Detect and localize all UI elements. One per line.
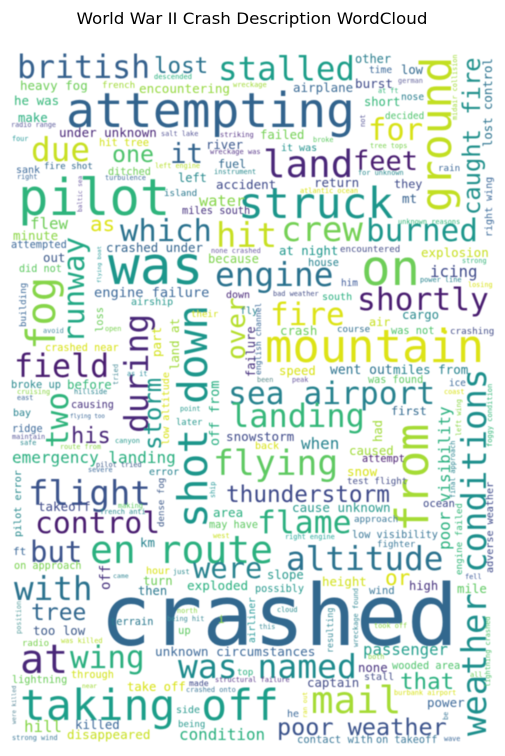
word: or: or: [385, 566, 410, 590]
word: down: down: [226, 290, 250, 301]
word: losing: losing: [468, 281, 493, 289]
word: structural failure: structural failure: [215, 676, 290, 684]
word: french anti: french anti: [100, 508, 146, 516]
word: low altitude: low altitude: [161, 372, 172, 445]
word: possibly: possibly: [255, 584, 304, 595]
word: their: their: [191, 310, 219, 320]
word: salt lake: salt lake: [161, 130, 198, 138]
word: miles south: miles south: [182, 205, 250, 217]
word: pilot error: pilot error: [13, 470, 24, 537]
word: snow: snow: [347, 464, 378, 479]
word: dense fog: dense fog: [157, 478, 167, 527]
word: crashed: crashed: [100, 567, 458, 666]
word: sea airport: sea airport: [228, 376, 435, 412]
word: building: building: [18, 283, 29, 327]
word: right wing: right wing: [484, 177, 495, 237]
word: came: came: [113, 572, 129, 580]
word: course: course: [337, 324, 370, 335]
word: ocean: ocean: [423, 498, 455, 510]
word: caused: caused: [349, 443, 394, 458]
word: as: as: [90, 212, 115, 236]
word: at ft: at ft: [378, 87, 398, 95]
word: through: through: [71, 670, 114, 681]
word: near: near: [82, 683, 97, 690]
word: burbank airport: burbank airport: [394, 689, 456, 697]
word: ditched: ditched: [108, 167, 151, 178]
word: poor weather: poor weather: [277, 713, 447, 741]
word: took off: took off: [374, 622, 407, 630]
word: flame: flame: [257, 505, 352, 541]
word: over: over: [222, 297, 252, 360]
word: left engine: left engine: [155, 162, 200, 170]
word: engine failed: engine failed: [454, 503, 465, 575]
word: not: not: [359, 114, 367, 127]
word: snowstorm: snowstorm: [226, 429, 294, 444]
word: failed: failed: [260, 128, 304, 142]
word: resulting: resulting: [325, 608, 335, 653]
word: just: just: [173, 568, 190, 576]
word: was not: was not: [391, 325, 434, 337]
word: midair collision: midair collision: [451, 55, 459, 120]
word: ice: ice: [449, 378, 466, 389]
word: accident: accident: [216, 177, 276, 192]
word: landing: landing: [230, 397, 365, 435]
word: severe: severe: [88, 466, 113, 474]
word: stalled: stalled: [218, 50, 355, 88]
word: british: british: [17, 50, 150, 86]
word: for: for: [368, 113, 423, 148]
word: speed: speed: [279, 364, 316, 378]
word: caught fire: caught fire: [458, 57, 486, 215]
word: out: out: [43, 250, 65, 265]
word: be: be: [442, 712, 450, 720]
word: avoid: avoid: [43, 327, 64, 335]
word: en route: en route: [90, 528, 273, 572]
word: went out: went out: [330, 363, 393, 378]
word: tree: tree: [31, 600, 86, 626]
word: for unknown: for unknown: [358, 169, 404, 177]
word: position: position: [15, 601, 23, 634]
word: which: which: [120, 214, 212, 249]
word: air: air: [369, 315, 390, 329]
word: mail: mail: [311, 678, 401, 722]
word: one: one: [112, 141, 154, 168]
word: contact with: contact with: [297, 734, 373, 746]
word: high: high: [409, 579, 438, 593]
word: decided: decided: [385, 111, 424, 122]
word: they: they: [394, 177, 422, 191]
word: airplane: airplane: [293, 80, 353, 95]
word: attempted: attempted: [11, 239, 67, 251]
word: from: from: [386, 424, 439, 532]
word: foggy condition: foggy condition: [486, 384, 494, 447]
word: were killed: were killed: [12, 686, 18, 724]
word: bad weather: bad weather: [273, 290, 319, 298]
word: taking off: taking off: [20, 681, 279, 731]
word: fly: fly: [240, 306, 258, 317]
word: runway: runway: [57, 237, 91, 343]
word: all: all: [470, 671, 483, 679]
word: him: him: [341, 278, 358, 289]
word: at: at: [20, 637, 68, 683]
word: fell: fell: [465, 573, 482, 581]
word: power: power: [427, 695, 465, 710]
word: side: side: [176, 705, 200, 716]
word: he: he: [287, 709, 299, 720]
word: right: right: [17, 173, 37, 181]
word: none crashed: none crashed: [211, 247, 261, 255]
word: fuel: fuel: [218, 157, 246, 171]
word: lightning crashed: lightning crashed: [484, 616, 492, 687]
word: low: low: [401, 63, 424, 77]
word: hillside: hillside: [74, 388, 107, 396]
word: height: height: [322, 574, 367, 589]
word: maintain: maintain: [12, 433, 45, 441]
word: crashing: crashing: [450, 326, 494, 337]
word: canyon: canyon: [115, 437, 140, 445]
word: struck: struck: [238, 179, 393, 229]
word: four: four: [12, 135, 28, 143]
word: return: return: [314, 175, 359, 190]
word: rain: rain: [438, 163, 460, 174]
word: up: up: [178, 625, 191, 637]
word: too low: too low: [33, 623, 86, 638]
word: were: were: [193, 551, 262, 585]
word: field: field: [14, 349, 109, 385]
word: off from: off from: [207, 381, 223, 446]
word: route from: route from: [60, 443, 101, 451]
word: on approach: on approach: [14, 561, 81, 572]
word: unknown reasons: unknown reasons: [398, 218, 460, 226]
word: may have: may have: [209, 520, 258, 531]
word: shortly: shortly: [357, 282, 489, 318]
word: his: his: [71, 424, 111, 449]
word: power line: power line: [420, 276, 462, 284]
word: unknown circumstances: unknown circumstances: [155, 644, 315, 659]
word: burst: burst: [355, 76, 393, 91]
word: mt: mt: [402, 191, 417, 206]
word: land at: land at: [168, 318, 182, 370]
word: flew: flew: [30, 214, 69, 233]
word: killed: killed: [75, 717, 120, 732]
word: ran out: ran out: [302, 692, 309, 718]
word: cloud: cloud: [277, 606, 297, 614]
word: because: because: [208, 252, 259, 266]
word: tried: tried: [112, 364, 120, 385]
word: captain: captain: [307, 675, 359, 690]
word: encountered: encountered: [340, 245, 400, 255]
word: crashed near: crashed near: [45, 343, 119, 354]
word: engine failure: engine failure: [94, 285, 209, 301]
word: house: house: [308, 257, 339, 269]
word: emergency landing: emergency landing: [12, 448, 176, 467]
word: pilot: pilot: [18, 168, 170, 227]
word: been: been: [257, 376, 273, 384]
word: that: that: [400, 669, 454, 695]
word: part: part: [149, 327, 164, 357]
word: weather conditions: weather conditions: [455, 369, 494, 736]
word: poor visibility: poor visibility: [435, 406, 454, 550]
word: left: left: [178, 171, 207, 185]
word: ft: ft: [13, 545, 26, 558]
word: area: area: [213, 505, 243, 520]
word: hour: hour: [146, 566, 170, 577]
word: two: two: [40, 392, 76, 448]
word: mile: mile: [457, 581, 487, 596]
word: i: i: [218, 613, 225, 626]
word: turbulence: turbulence: [105, 174, 146, 182]
word: south: south: [322, 292, 352, 303]
word: fire: fire: [270, 297, 345, 333]
word: strong: strong: [462, 257, 487, 265]
word: none: none: [358, 661, 388, 675]
word: disappeared: disappeared: [67, 727, 150, 742]
word: heavy fog: heavy fog: [20, 78, 88, 93]
word: hit tree: hit tree: [99, 137, 149, 149]
word: low visibility: low visibility: [352, 530, 438, 541]
word: bay: bay: [13, 408, 31, 419]
word: due: due: [31, 131, 90, 169]
word: with: with: [14, 570, 92, 608]
word: airship: airship: [131, 297, 173, 308]
word: final approach: final approach: [449, 441, 457, 498]
word: water: water: [199, 192, 245, 210]
word: was killed: was killed: [61, 637, 102, 645]
word: explosion: explosion: [421, 245, 489, 260]
word: made: made: [189, 678, 209, 688]
word: was found: was found: [368, 375, 423, 386]
word: crashed onto: crashed onto: [186, 686, 236, 694]
word: then: then: [138, 584, 167, 598]
word: exploded: exploded: [187, 578, 248, 593]
word: passenger: passenger: [363, 640, 448, 659]
word: east: east: [17, 394, 33, 402]
word: broke up: broke up: [11, 379, 61, 391]
word: approach: approach: [354, 514, 398, 525]
word: flying boat: flying boat: [97, 246, 103, 283]
word: german: german: [398, 77, 423, 85]
word: adverse weather: adverse weather: [485, 482, 496, 573]
word: before: before: [67, 377, 112, 392]
word: cause unknown: cause unknown: [292, 500, 391, 515]
word: miles from: miles from: [393, 362, 468, 377]
word: making: making: [118, 502, 143, 510]
word: pilot tried: pilot tried: [96, 461, 142, 469]
word: strong wind: strong wind: [12, 734, 58, 742]
word: ship: ship: [209, 482, 217, 498]
word: airliner: airliner: [247, 597, 258, 643]
word: lost control: lost control: [481, 58, 495, 147]
word: wing: wing: [70, 640, 145, 676]
word: flying too: flying too: [70, 414, 105, 420]
word: burned: burned: [366, 213, 478, 249]
word: terrain: terrain: [110, 616, 153, 628]
word: open: open: [105, 325, 121, 333]
word: ridge: ridge: [12, 424, 43, 435]
word: island: island: [164, 188, 197, 199]
word: take off: take off: [127, 680, 186, 694]
word: flying: flying: [213, 444, 338, 484]
word: lightning: lightning: [12, 675, 67, 686]
word: time: time: [369, 65, 392, 76]
word: later: later: [176, 418, 202, 428]
word: storm: storm: [139, 378, 167, 450]
word: crew: crew: [281, 210, 363, 250]
word: lost: lost: [154, 53, 208, 79]
word: flight: flight: [28, 474, 151, 514]
word: feet: feet: [353, 146, 418, 177]
word: short: short: [364, 95, 400, 109]
word: takeoff: takeoff: [38, 499, 91, 514]
word: was named: was named: [178, 647, 357, 686]
word: during: during: [117, 314, 156, 433]
title: World War II Crash Description WordCloud: [76, 9, 428, 28]
word: condition: condition: [179, 725, 265, 744]
word: ground: ground: [412, 57, 462, 212]
word: both: both: [368, 653, 384, 661]
word: causing: causing: [71, 400, 114, 411]
word: north: north: [177, 607, 197, 615]
word: descended: descended: [154, 73, 192, 81]
word: failure: failure: [244, 326, 258, 377]
word: encountering: encountering: [139, 81, 230, 96]
word: engine: engine: [215, 256, 333, 294]
word: nose: nose: [401, 92, 424, 103]
word: cargo: cargo: [402, 308, 439, 322]
word: left wing: left wing: [455, 399, 463, 436]
word: did not: did not: [19, 264, 62, 275]
word: cruising: cruising: [17, 388, 50, 396]
word: error: error: [149, 467, 179, 478]
word: sank: sank: [16, 165, 40, 176]
word: wreckage: wreckage: [233, 81, 267, 89]
word: under unknown: under unknown: [59, 125, 157, 140]
word: instrument: instrument: [214, 168, 256, 176]
word: fighter: fighter: [377, 540, 416, 550]
word: it was: it was: [281, 143, 317, 154]
word: thunderstorm: thunderstorm: [226, 482, 390, 508]
word: safe: safe: [20, 439, 36, 447]
word: was: was: [108, 236, 203, 297]
word: hit: hit: [216, 216, 277, 255]
word: coast: coast: [444, 388, 464, 396]
word: as it: as it: [127, 370, 147, 378]
word: land: land: [263, 142, 353, 186]
word: crashed under: crashed under: [106, 240, 203, 255]
word: back: back: [255, 441, 279, 452]
word: turn: turn: [143, 574, 173, 588]
word: it: it: [170, 138, 203, 170]
word: fog: fog: [17, 277, 65, 350]
word: being: being: [178, 720, 205, 730]
word: broke: broke: [313, 136, 333, 144]
word: river: river: [206, 138, 243, 152]
word: other: other: [355, 52, 391, 66]
word: wreckage was: wreckage was: [210, 148, 261, 156]
word: minute: minute: [13, 228, 58, 243]
word: striking: striking: [220, 131, 254, 139]
word: km: km: [140, 535, 155, 550]
word: at night: at night: [279, 244, 338, 258]
word: on takeoff: on takeoff: [376, 735, 437, 746]
word: wreckage found: wreckage found: [352, 588, 360, 647]
word: but: but: [30, 535, 82, 569]
word: icing: icing: [430, 262, 478, 281]
word: stall: stall: [364, 672, 394, 683]
word: test flight: test flight: [347, 477, 407, 487]
word: top: top: [237, 668, 253, 678]
word: english channel: english channel: [254, 303, 263, 375]
word: radio range: radio range: [11, 121, 56, 129]
word: attempt: attempt: [362, 454, 405, 465]
word: wooded area: wooded area: [392, 660, 460, 672]
word: peak: peak: [292, 376, 308, 384]
word: on: on: [361, 240, 420, 297]
word: atlantic ocean: atlantic ocean: [300, 187, 358, 195]
word: make: make: [18, 111, 48, 125]
icon: yellow dot: [443, 330, 447, 334]
word: when: when: [301, 434, 339, 453]
word: french: french: [102, 80, 135, 91]
word: baltic sea: baltic sea: [77, 175, 84, 212]
word: wind: wind: [369, 584, 395, 597]
word: being hit: being hit: [167, 615, 204, 623]
word: tree tops: tree tops: [370, 142, 407, 150]
word: first: first: [391, 404, 427, 418]
word: point: point: [180, 405, 200, 413]
word: west: west: [213, 532, 230, 540]
word: had: had: [371, 420, 385, 442]
word: radio: radio: [22, 639, 49, 649]
word: off (rotated): off: [98, 565, 114, 590]
word: hill: hill: [24, 717, 62, 736]
word: altitude: altitude: [286, 540, 443, 578]
word: slope: slope: [267, 568, 304, 582]
word: he was: he was: [14, 93, 59, 108]
word: fire shot: fire shot: [44, 162, 93, 172]
word: mountain: mountain: [265, 320, 484, 373]
word: this: this: [259, 623, 275, 631]
word: shot down: shot down: [169, 305, 217, 528]
word: wave: wave: [444, 735, 460, 743]
word: attempting: attempting: [66, 83, 355, 139]
word: loss: loss: [94, 307, 106, 332]
word: crash: crash: [280, 323, 317, 338]
word: right engine: right engine: [285, 533, 335, 541]
word: control: control: [35, 506, 160, 541]
